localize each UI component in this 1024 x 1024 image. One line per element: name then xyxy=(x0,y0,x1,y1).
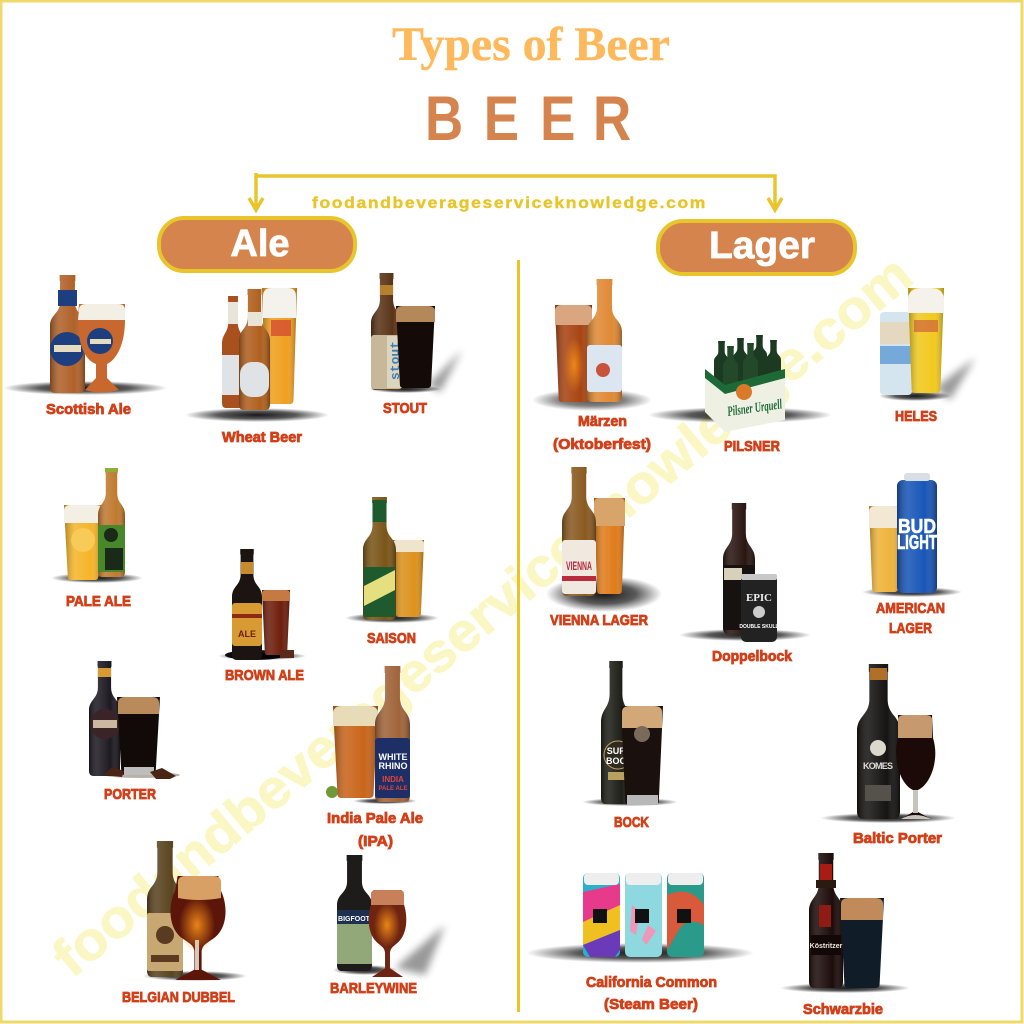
heading: BEER: BEER xyxy=(425,84,631,154)
title: Types of Beer xyxy=(392,18,670,71)
beer: Wheat Beer xyxy=(185,288,329,446)
connector arrows xyxy=(249,173,782,210)
category: Ale xyxy=(159,218,355,271)
beer: American Lager xyxy=(862,473,962,637)
label: Belgian Dubbel: BELGIAN DUBBEL xyxy=(122,989,235,1006)
beer: Barleywine xyxy=(330,855,445,997)
beer: Brown Ale xyxy=(218,549,306,684)
beer: Vienna Lager xyxy=(546,467,662,629)
label: Pilsner: PILSNER xyxy=(724,438,780,455)
beer: Doppelbock: EPIC xyxy=(746,592,772,604)
beer: Vienna Lager: VIENNA xyxy=(566,559,592,573)
label: American: AMERICAN xyxy=(876,600,945,617)
diagonal watermark: foodandbeverageserviceknowledge.com xyxy=(41,244,923,988)
beer: India Pale Ale: PALE ALE xyxy=(378,786,408,792)
beer: Brown Ale: ALE xyxy=(238,629,256,639)
beer: American Lager: BUD xyxy=(898,516,936,538)
category: Lager: Lager xyxy=(709,225,815,267)
beer: Pilsner: Pilsner Urquell xyxy=(726,397,783,420)
beer: Schwarzbier: Köstritzer xyxy=(810,943,843,950)
label: Lager: LAGER xyxy=(889,620,932,637)
label: (IPA): (IPA) xyxy=(358,833,393,850)
beer: Saison xyxy=(345,497,439,647)
beer: Porter xyxy=(89,661,180,803)
label: Brown Ale: BROWN ALE xyxy=(225,667,304,684)
beer: India Pale Ale: WHITE xyxy=(378,752,408,762)
beer: Barleywine: BIGFOOT xyxy=(338,916,371,923)
beer: Bock: SUP xyxy=(607,746,625,756)
label: Barleywine: BARLEYWINE xyxy=(330,980,417,997)
beer: Baltic Porter: KOMES xyxy=(863,761,893,771)
beer: Marzen xyxy=(532,279,652,453)
label: Baltic Porter: Baltic Porter xyxy=(853,830,942,847)
label: Scottish Ale: Scottish Ale xyxy=(46,401,131,418)
beer: Bock: BOC xyxy=(606,756,626,766)
beer: Stout: stout xyxy=(388,341,403,380)
label: Pale Ale: PALE ALE xyxy=(66,593,131,610)
label: Stout: STOUT xyxy=(383,400,427,417)
label: Heles: HELES xyxy=(895,408,937,425)
beer: Baltic Porter xyxy=(820,664,956,847)
beer: Scottish Ale xyxy=(3,275,167,418)
label: Marzen: Märzen xyxy=(578,413,627,430)
label: Doppelbock: Doppelbock xyxy=(712,648,793,665)
beer: Pale Ale xyxy=(51,468,143,610)
label: (Oktoberfest): (Oktoberfest) xyxy=(553,436,651,453)
beer: India Pale Ale: INDIA xyxy=(382,775,404,784)
category: Lager xyxy=(658,221,855,274)
beer: India Pale Ale: RHINO xyxy=(378,761,408,771)
beer: Bock xyxy=(582,661,678,831)
beer: Pilsner xyxy=(648,335,832,455)
label: (Steam Beer): (Steam Beer) xyxy=(604,996,698,1013)
beer: Belgian Dubbel xyxy=(122,841,247,1006)
beer: Stout xyxy=(369,273,462,417)
label: Porter: PORTER xyxy=(104,786,156,803)
beer: Heles xyxy=(879,288,975,425)
label: Vienna Lager: VIENNA LAGER xyxy=(550,612,648,629)
category: Ale: Ale xyxy=(230,223,290,265)
beer: Schwarzbier xyxy=(780,853,910,1018)
label: Schwarzbie: Schwarzbie xyxy=(803,1001,883,1018)
beer: Doppelbock: DOUBLE SKULL xyxy=(739,624,779,630)
column divider xyxy=(517,260,520,1012)
beer: American Lager: LIGHT xyxy=(897,532,937,554)
label: India Pale Ale: India Pale Ale xyxy=(327,810,423,827)
beer: India Pale Ale xyxy=(326,666,423,850)
website text: foodandbeverageserviceknowledge.com xyxy=(312,195,707,212)
label: Bock: BOCK xyxy=(614,814,649,831)
beer: Doppelbock xyxy=(679,503,811,665)
beer: California Common xyxy=(526,873,754,1013)
label: Saison: SAISON xyxy=(367,630,416,647)
label: Wheat Beer: Wheat Beer xyxy=(222,429,302,446)
label: California Common: California Common xyxy=(586,974,717,991)
